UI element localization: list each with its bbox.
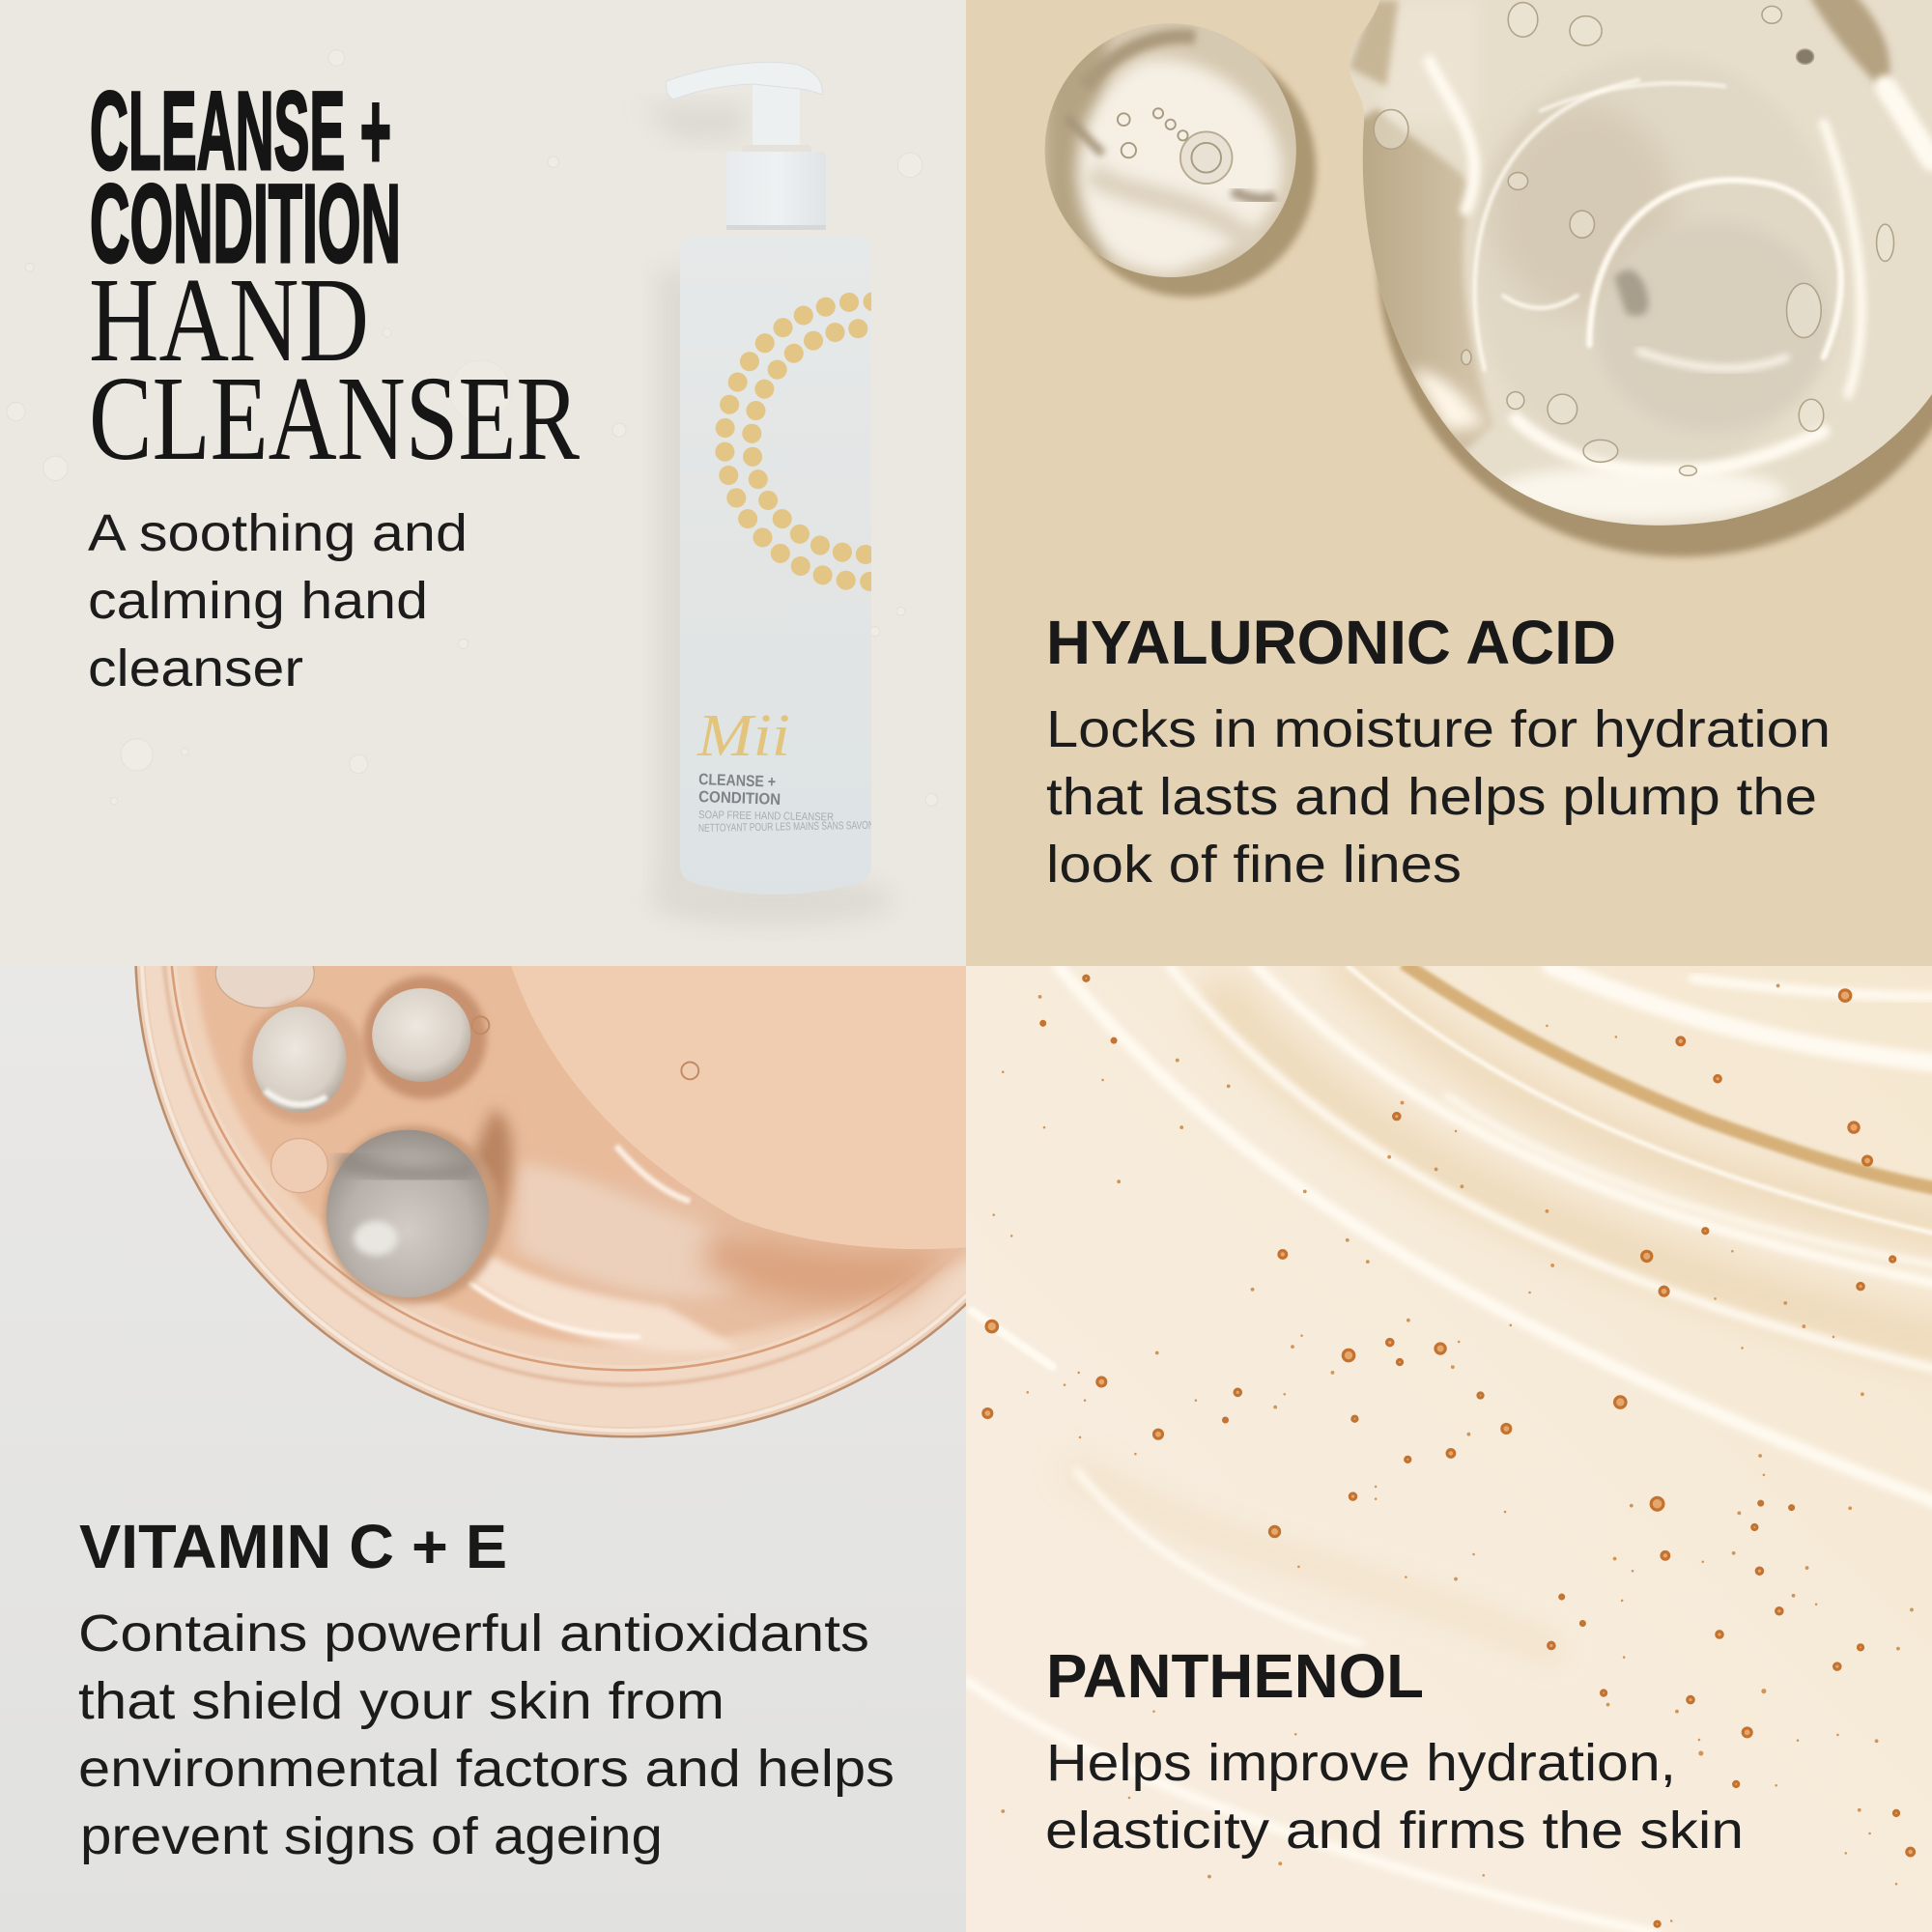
- ingredient text: vitamin c + e: [78, 1512, 895, 1865]
- white swooshes: [966, 966, 1932, 1932]
- photo: gel drops: [1045, 0, 1932, 557]
- label description: SOAP FREE HAND CLEANSER: [698, 810, 834, 823]
- bubble: upper right: [363, 976, 487, 1099]
- heading: product name: CLEANSER: [89, 353, 580, 486]
- panel: panthenol: [966, 963, 1932, 1932]
- bubble: small clear: [271, 1139, 327, 1193]
- dish liquid: [146, 966, 966, 1427]
- shaded cream bands: [1077, 966, 1932, 1650]
- heading: product name: CLEANSE +: [90, 70, 391, 193]
- bubble: large grey: [324, 1126, 501, 1303]
- bubble: top partial: [214, 966, 315, 1009]
- bubble: upper left: [242, 1001, 366, 1123]
- label name: [699, 773, 781, 805]
- dish rim: [134, 966, 966, 1437]
- product description: A soothing and: [88, 504, 468, 562]
- product description: calming hand: [88, 572, 428, 630]
- label description: [699, 810, 871, 832]
- fine gel specks: [992, 983, 1914, 1922]
- ingredient text: hyaluronic acid: [1046, 608, 1831, 894]
- ingredient text: hyaluronic acid: that lasts and helps plump the: [1046, 768, 1817, 826]
- heading: product name: HAND: [89, 254, 369, 387]
- gel droplets background: [7, 50, 938, 806]
- small drop: [1045, 22, 1316, 297]
- ingredient text: vitamin c + e: Contains powerful antioxidants: [78, 1605, 869, 1662]
- panel: hyaluronic acid: [966, 0, 1932, 966]
- ingredient text: panthenol: Helps improve hydration,: [1046, 1734, 1676, 1792]
- bottle label: [696, 715, 871, 832]
- bottle shadow: [642, 104, 894, 925]
- large drop: [1349, 0, 1932, 557]
- ingredient text: hyaluronic acid: Locks in moisture for hydration: [1046, 700, 1831, 758]
- ingredient text: panthenol: PANTHENOL: [1046, 1641, 1424, 1711]
- collar: [726, 152, 826, 230]
- ingredient text: panthenol: [1045, 1641, 1744, 1860]
- photo: gel swirl: [966, 963, 1932, 1932]
- product description: [88, 513, 464, 686]
- heading: product name: CONDITION: [90, 162, 401, 286]
- ingredient text: panthenol: elasticity and firms the skin: [1045, 1802, 1744, 1860]
- label name: CLEANSE +: [698, 771, 776, 791]
- photo: petri dish: [134, 966, 966, 1437]
- pump bottle: [666, 62, 871, 895]
- bottle body: [680, 237, 871, 895]
- heading: product name: [91, 90, 580, 460]
- label description: NETTOYANT POUR LES MAINS SANS SAVON: [698, 820, 874, 835]
- oil bubbles: [215, 939, 698, 1303]
- panel: product intro: [0, 0, 1005, 966]
- logo: Mii: [696, 703, 790, 769]
- panel: vitamin c + e: [0, 461, 1122, 1932]
- gold ring pattern: [715, 292, 871, 591]
- label name: CONDITION: [698, 788, 781, 809]
- ingredient text: vitamin c + e: VITAMIN C + E: [79, 1512, 507, 1581]
- product description: cleanser: [88, 639, 303, 697]
- golden swirl band: [1404, 963, 1932, 1189]
- ingredient text: vitamin c + e: prevent signs of ageing: [80, 1807, 663, 1865]
- ingredient text: vitamin c + e: that shield your skin from: [78, 1672, 724, 1730]
- ingredient text: hyaluronic acid: look of fine lines: [1046, 836, 1462, 894]
- orange bubbles: [983, 976, 1915, 1926]
- ingredient text: hyaluronic acid: HYALURONIC ACID: [1046, 608, 1616, 677]
- pump stem and head: [667, 62, 822, 155]
- bubble: tiny: [472, 1016, 698, 1079]
- ingredient text: vitamin c + e: environmental factors and helps: [78, 1740, 895, 1798]
